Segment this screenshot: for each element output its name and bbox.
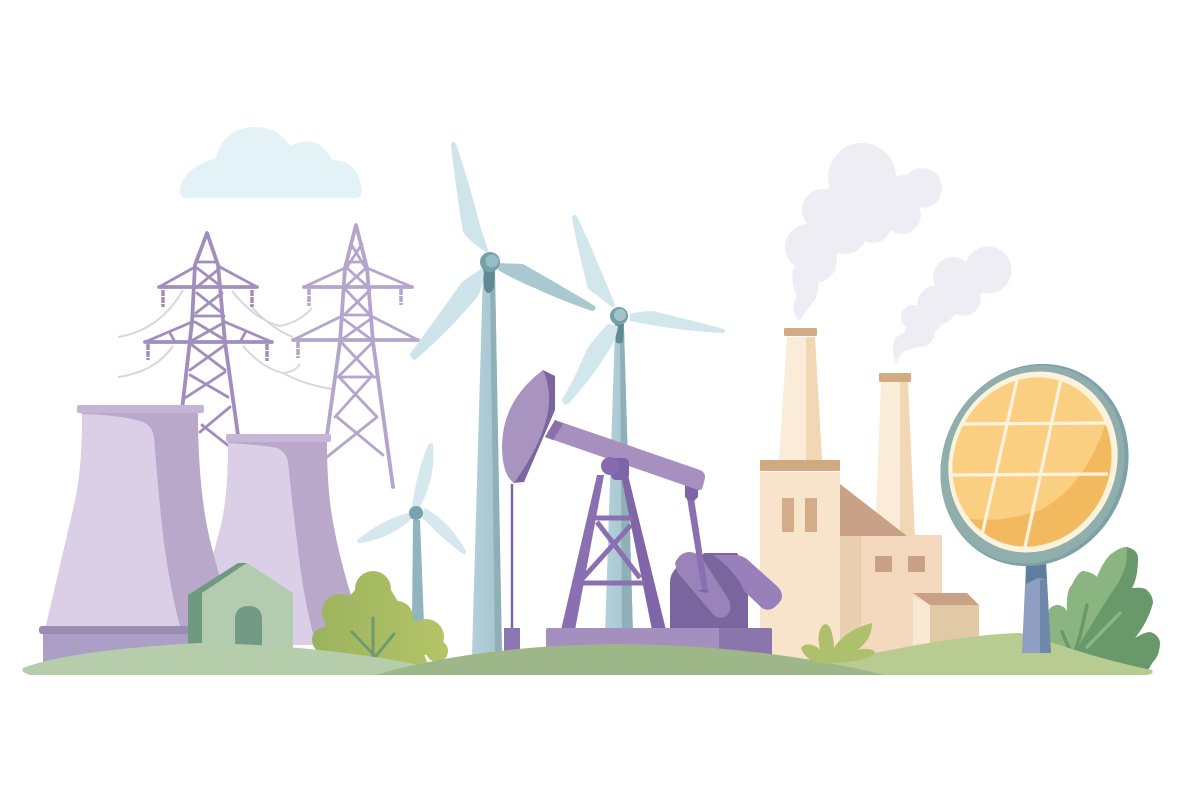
horsehead back [513, 370, 555, 483]
large turbine blade left [410, 268, 484, 360]
pump jack [502, 370, 782, 657]
cooling tower: rear [190, 434, 368, 645]
small turbine hub [409, 506, 423, 520]
medium turbine tower [605, 328, 633, 634]
cooling tower front rim [77, 405, 204, 413]
bush foliage [312, 571, 448, 670]
polished rod [511, 484, 513, 630]
cooling tower base [43, 630, 193, 666]
derrick right leg [621, 475, 666, 630]
solar panel inner rim [919, 344, 1147, 580]
pitman head [685, 485, 698, 501]
house side [188, 563, 247, 650]
small plant leaves [801, 623, 875, 663]
small turbine tower [412, 520, 424, 625]
crank housing [670, 553, 748, 630]
medium turbine hub highlight [614, 309, 626, 321]
main building cornice [760, 460, 840, 471]
annex window left [875, 556, 892, 572]
bush veins [352, 618, 394, 656]
horsehead front [502, 370, 549, 483]
large turbine blade right [498, 263, 596, 311]
hill: left [22, 643, 420, 675]
derrick left leg [561, 475, 604, 630]
shed side [930, 605, 979, 649]
large turbine tower shade [490, 271, 502, 655]
medium turbine hub [610, 307, 628, 325]
annex window right [908, 556, 925, 572]
medium wind turbine [562, 215, 725, 634]
rod block [504, 628, 520, 652]
cooling tower rear highlight [190, 443, 316, 645]
walking beam [545, 420, 705, 490]
large turbine nacelle [483, 268, 495, 293]
bush: right [1049, 547, 1160, 675]
medium turbine blades [562, 215, 725, 404]
large wind turbine [410, 142, 596, 655]
base light [546, 628, 721, 657]
medium turbine nacelle [615, 324, 624, 344]
main building [760, 472, 840, 662]
cooling tower rear rim [226, 434, 331, 442]
cloud [180, 127, 362, 198]
large turbine hub [480, 252, 500, 272]
chimney right cap [879, 373, 911, 382]
solar panel cells [925, 351, 1139, 573]
solar panel post [1022, 563, 1051, 653]
house door [235, 606, 262, 650]
cooling tower base band [39, 626, 191, 634]
power lines [118, 290, 332, 389]
smoke left [785, 143, 942, 321]
factory [760, 143, 1012, 662]
shed front [913, 596, 930, 650]
solar panel ring [908, 335, 1157, 594]
solar panel grid [950, 379, 1108, 547]
hill: right [800, 633, 1153, 675]
illustration: energy landscape [22, 127, 1160, 675]
solar panel [940, 364, 1129, 653]
medium turbine tower shade [620, 328, 633, 634]
hill: middle [375, 644, 885, 675]
chimney right shade [900, 382, 915, 540]
beam neck shade [545, 420, 563, 440]
crank arm left [675, 552, 730, 618]
derrick braces [580, 518, 644, 583]
chimney left cap [784, 328, 817, 336]
pitman arm [687, 498, 708, 590]
roof [840, 484, 907, 536]
house front [202, 563, 293, 650]
solar panel ring shade [908, 333, 1161, 597]
large turbine hub highlight [486, 254, 498, 268]
small plant [801, 623, 875, 663]
solar panel post top [1026, 563, 1047, 584]
bush right dark foliage [1049, 547, 1160, 675]
annex front [861, 535, 942, 655]
bush right veins [1062, 605, 1087, 655]
shed roof [913, 593, 979, 605]
smoke right [893, 246, 1012, 363]
base dark [719, 628, 772, 657]
crank arm right [713, 555, 782, 610]
chimney left shade [806, 337, 822, 460]
annex side [840, 536, 861, 651]
solar panel shading [970, 424, 1112, 547]
chimney left [779, 337, 822, 460]
bush right light foliage [1049, 547, 1127, 660]
main window right [805, 498, 817, 532]
chimney right [875, 382, 915, 540]
cooling tower front body [45, 412, 238, 630]
bush right light vein [1087, 613, 1120, 647]
pylon: right [293, 225, 418, 487]
small wind turbine [357, 443, 466, 625]
cooling tower front highlight [45, 414, 181, 630]
large turbine tower [472, 271, 502, 655]
pivot bearing [611, 458, 629, 480]
solar panel post shade [1040, 580, 1051, 653]
pitman foot [698, 588, 708, 593]
house [188, 563, 293, 650]
main window left [782, 498, 794, 532]
cooling tower: front [39, 405, 238, 666]
bush: left [312, 571, 448, 670]
small turbine blades [357, 443, 466, 555]
cooling tower rear body [190, 441, 368, 645]
pivot bearing front [601, 457, 619, 475]
pylon: left [145, 233, 272, 450]
large turbine blade up [451, 142, 488, 253]
